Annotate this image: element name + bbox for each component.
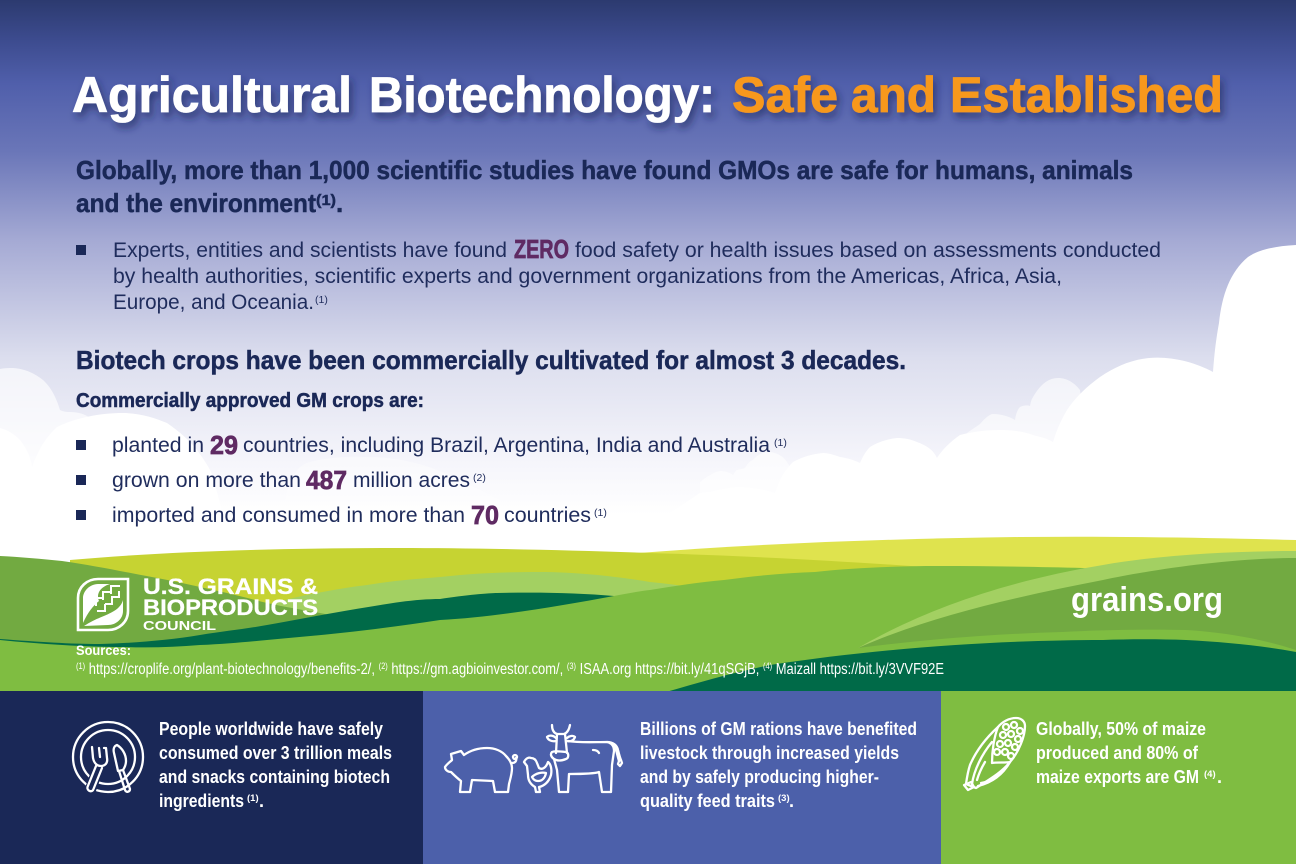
sources (76, 642, 944, 678)
bullet: 487 million acres (76, 465, 486, 495)
bullet: 70 countries: imported and consumed in more than (112, 504, 465, 527)
bullet: planted in 29 countries: (1) (774, 437, 787, 449)
bullet: zero food safety issues: by health authorities, scientific experts and government organizations from the Americas, Africa, Asia, (113, 265, 1062, 288)
clouds: right (600, 245, 1296, 560)
bullet: 487 million acres: million acres (353, 469, 470, 492)
main green hill (0, 566, 1296, 700)
sources: https://gm.agbioinvestor.com/, (388, 661, 567, 678)
text: meals (159, 719, 392, 811)
title: and (851, 67, 936, 123)
bullet: zero food safety issues: Experts, entities and scientists have found (113, 239, 507, 262)
heading: safety studies: Globally, more than 1,000 scientific studies have found GMOs are safe for humans, animals (76, 155, 1133, 185)
title: Safe (732, 67, 838, 123)
logo: U.S. Grains & Bioproducts Council (78, 574, 318, 633)
yellow-green field (70, 548, 925, 700)
icon: leaf mark (78, 579, 128, 630)
icon: pig, chicken and cow (445, 725, 622, 792)
heading: safety studies: (1) (316, 192, 336, 209)
sources: (1) (76, 661, 85, 671)
panel: meals (0, 691, 423, 864)
icon: plate and cutlery (73, 722, 143, 792)
heading: safety studies (76, 155, 1133, 218)
text: maize: maize exports are GM (1036, 767, 1199, 787)
bullet: 70 countries: countries (504, 504, 591, 527)
text: maize (1036, 719, 1222, 787)
heading: commercially cultivated: Biotech crops have been commercially cultivated for almost 3 decades. (76, 345, 906, 375)
sources: (2) (379, 661, 388, 671)
right olive hill (858, 558, 1296, 650)
bullet: 487 million acres: grown on more than (112, 469, 301, 492)
panel: livestock (423, 691, 941, 864)
panel: maize (941, 691, 1296, 864)
bullet: planted in 29 countries: 29 (210, 430, 238, 460)
fields and hills (0, 537, 1296, 700)
bullet: 487 million acres: (2) (473, 472, 486, 484)
bullet: planted in 29 countries: planted in (112, 434, 204, 457)
icon: pig (445, 748, 512, 792)
bullet: zero food safety issues (76, 234, 1161, 314)
bullet: zero food safety issues: ZERO (514, 234, 569, 264)
title: Biotechnology: (369, 67, 715, 123)
text: livestock: (3) (778, 793, 790, 804)
bullet: planted in 29 countries: countries, including Brazil, Argentina, India and Australia (243, 434, 770, 457)
title: Agricultural (72, 67, 352, 123)
title: Established (950, 67, 1223, 123)
bullet: zero food safety issues: food safety or health issues based on assessments conducted (575, 239, 1161, 262)
subheading: approved GM crops: Commercially approved GM crops are: (76, 390, 424, 412)
text: maize: . (1217, 767, 1222, 787)
sources: (3) (567, 661, 576, 671)
sky background (0, 0, 1296, 560)
website url: grains.org (1071, 581, 1223, 619)
text: livestock: Billions of GM rations have benefited (640, 719, 917, 739)
text: maize: Globally, 50% of maize (1036, 719, 1206, 739)
text: meals: consumed over 3 trillion meals (159, 743, 392, 763)
sources: Maizall https://bit.ly/3VVF92E (772, 661, 944, 678)
text: maize: produced and 80% of (1036, 743, 1199, 763)
bullet: zero food safety issues: (1) (315, 294, 328, 306)
sources: Sources: (76, 642, 131, 658)
icon: corn cob (964, 718, 1025, 790)
heading: safety studies: . (336, 188, 343, 218)
bullet: planted in 29 countries (76, 430, 787, 460)
icon: cow (552, 725, 570, 734)
left dark-olive hill (0, 556, 345, 660)
bullet: 70 countries: (1) (594, 507, 607, 519)
sources: ISAA.org https://bit.ly/41qSGjB, (576, 661, 763, 678)
bullet: 487 million acres: 487 (306, 465, 347, 495)
bullet: 70 countries: 70 (471, 500, 499, 530)
right light swoosh (858, 551, 1296, 648)
bright yellow field (560, 537, 1296, 700)
text: meals: (1) (247, 793, 259, 804)
right dark green hill (666, 639, 1296, 692)
heading: safety studies: and the environment (76, 188, 316, 218)
text: livestock: quality feed traits (640, 791, 775, 811)
text: livestock: livestock through increased yields (640, 743, 899, 763)
title (72, 67, 1223, 123)
logo: U.S. Grains & Bioproducts Council: BIOPRODUCTS (143, 595, 318, 620)
text: meals: . (259, 791, 264, 811)
sources: (4) (763, 661, 772, 671)
text: maize: (4) (1204, 769, 1216, 780)
text: meals: People worldwide have safely (159, 719, 383, 739)
clouds: left (0, 368, 500, 560)
dark green wedge (0, 593, 640, 680)
light green rise (270, 572, 730, 700)
text: meals: and snacks containing biotech (159, 767, 390, 787)
bullet: zero food safety issues: Europe, and Oceania. (113, 291, 314, 314)
bullet: 70 countries (76, 500, 607, 530)
sources: https://croplife.org/plant-biotechnology/benefits-2/, (85, 661, 379, 678)
logo: U.S. Grains & Bioproducts Council: U.S. GRAINS & (143, 574, 318, 599)
text: livestock: and by safely producing higher- (640, 767, 879, 787)
text: meals: ingredients (159, 791, 244, 811)
text: livestock (640, 719, 917, 811)
icon: chicken (524, 758, 551, 792)
text: livestock: . (789, 791, 794, 811)
logo: U.S. Grains & Bioproducts Council: COUNCIL (143, 618, 216, 633)
